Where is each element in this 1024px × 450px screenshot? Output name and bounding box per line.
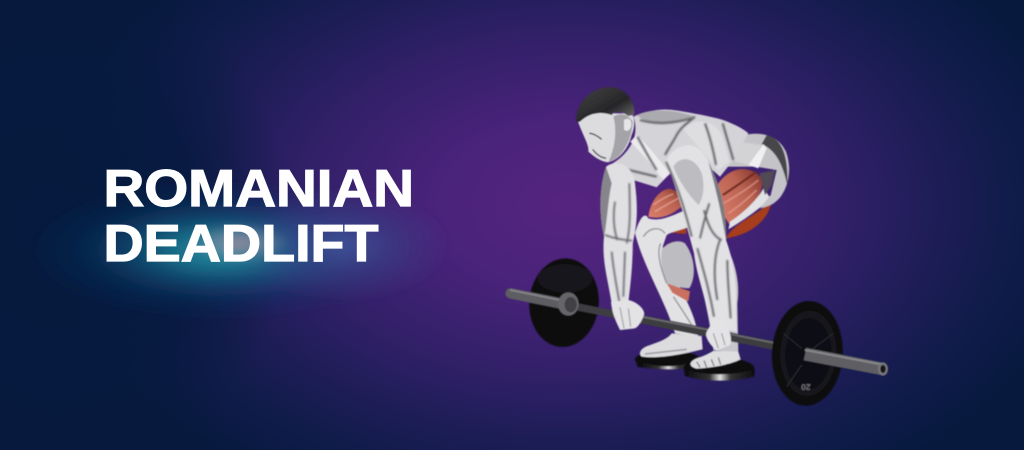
- teal glow behind title: [0, 170, 455, 330]
- near arm: [666, 145, 737, 332]
- far hand: [611, 300, 644, 330]
- title: DEADLIFT: [104, 215, 379, 273]
- title: ROMANIAN: [104, 160, 414, 218]
- far thigh muscle: [648, 189, 687, 234]
- far weight plate: [526, 255, 602, 350]
- barbell shaft far end: [510, 290, 615, 316]
- near hand: [706, 320, 731, 351]
- far arm: [600, 163, 637, 303]
- barbell sleeve near end: [805, 350, 888, 376]
- plate marking: 20: [801, 382, 811, 392]
- head: [576, 87, 634, 162]
- near weight plate: [769, 299, 845, 407]
- barbell shaft near section: [637, 316, 777, 346]
- torso and back: [607, 110, 748, 187]
- title: [104, 160, 414, 273]
- near foot: [690, 351, 741, 369]
- hamstrings and glutes: [718, 134, 789, 238]
- illustration: athlete with barbell: [510, 87, 888, 407]
- far foot: [640, 333, 703, 357]
- foot platforms: [635, 350, 755, 381]
- far leg: [635, 210, 698, 337]
- near lower leg: [697, 250, 738, 353]
